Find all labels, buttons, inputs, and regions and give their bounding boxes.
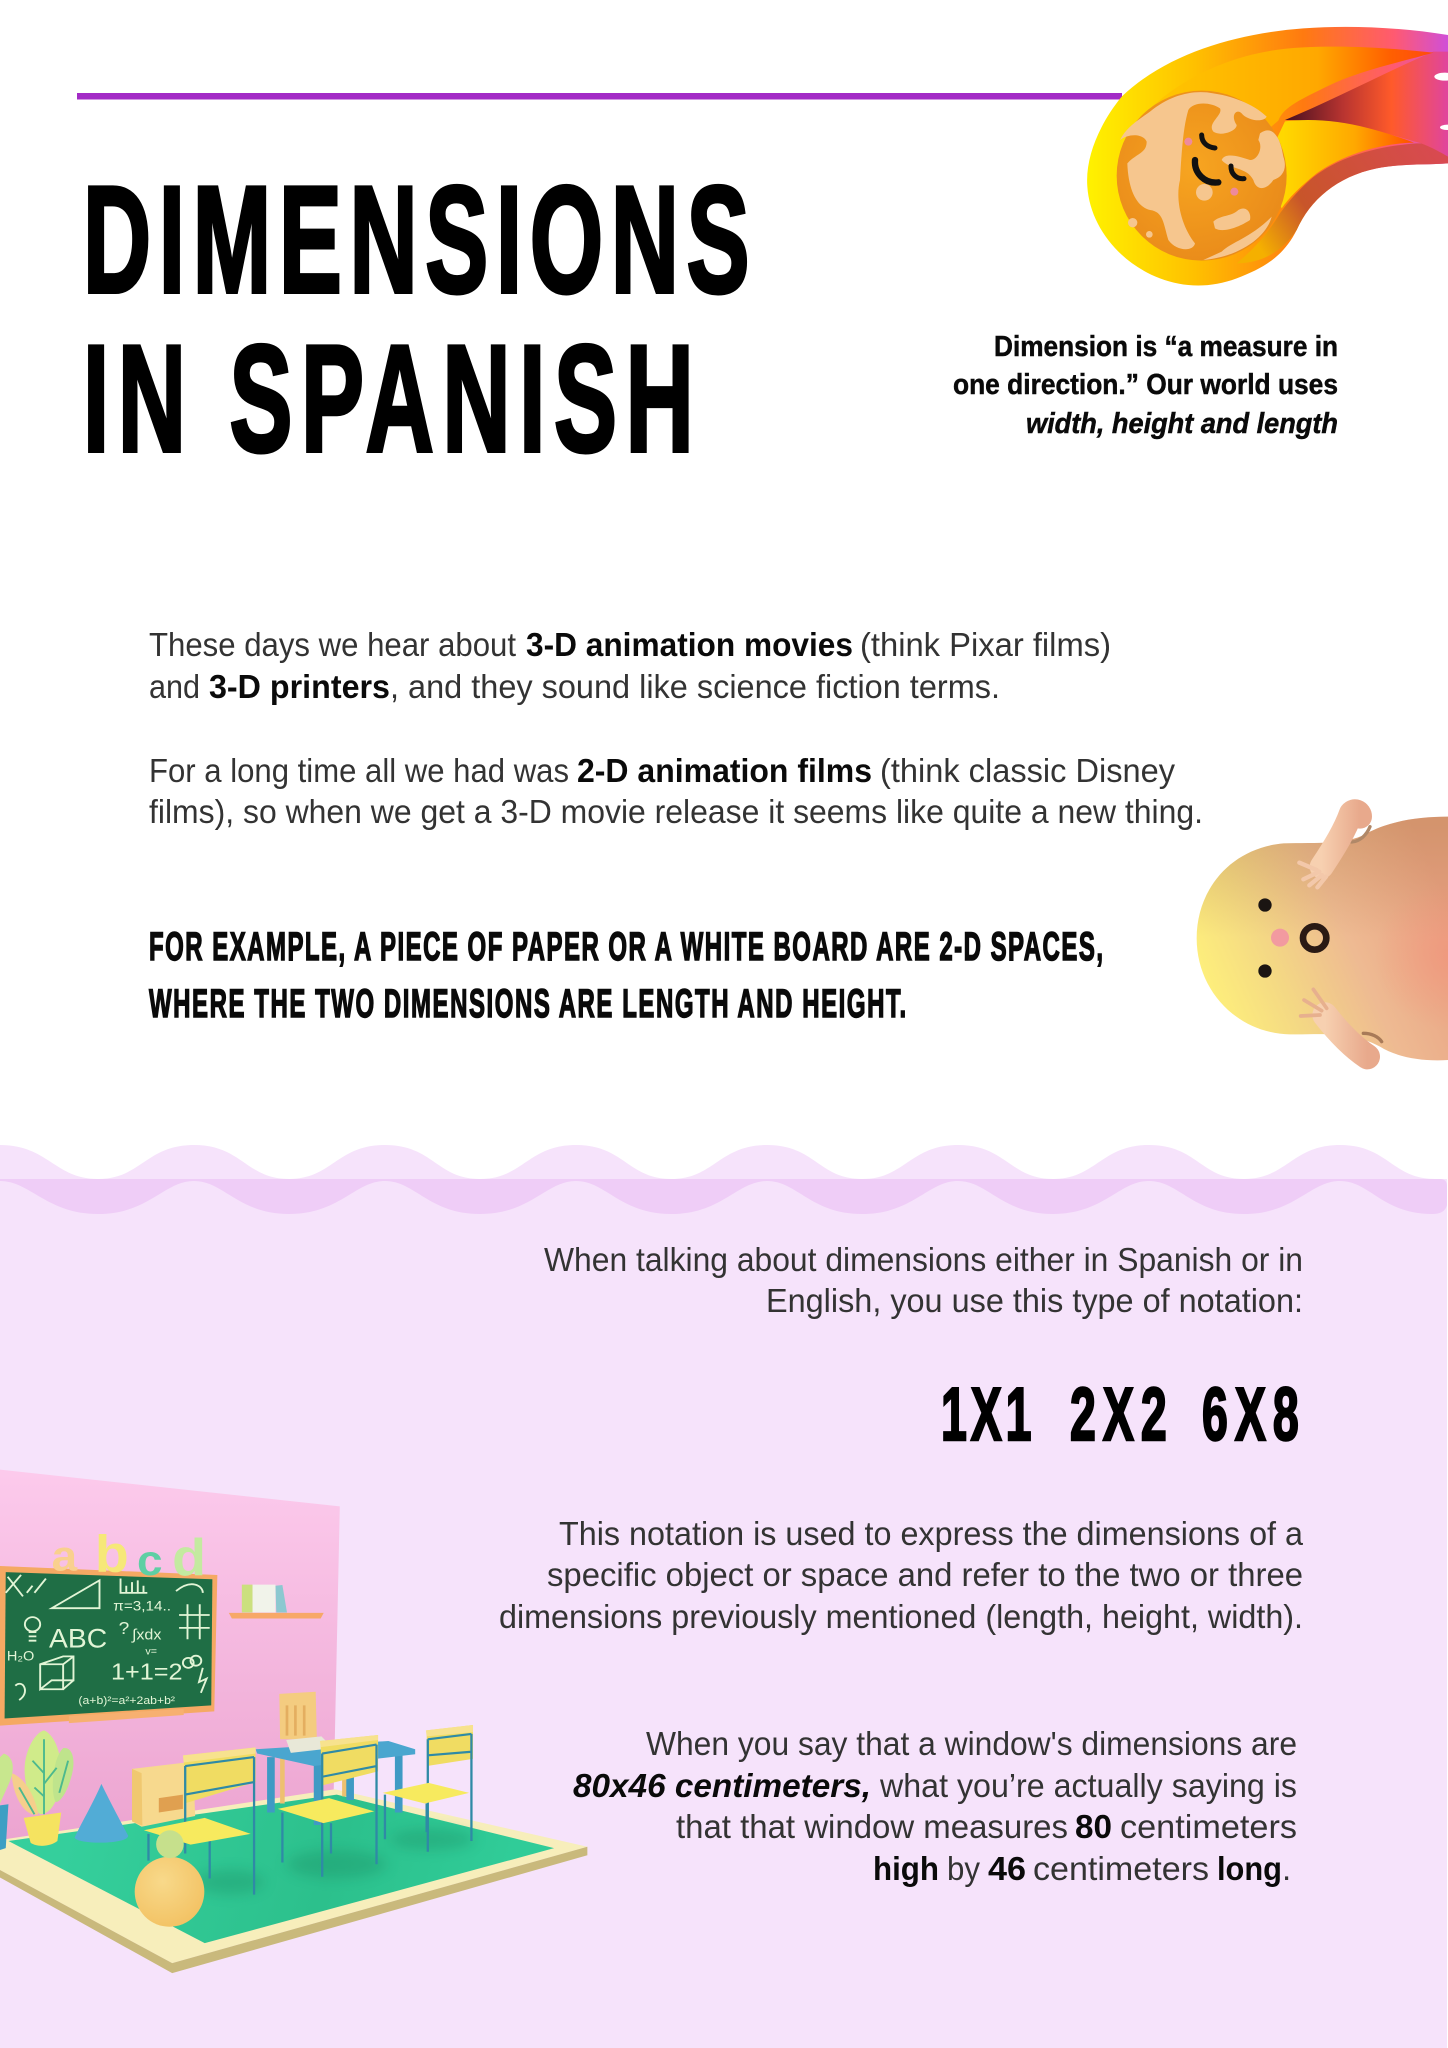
intro paragraph two: (think classic Disney [880, 752, 1175, 789]
stacked balls [135, 1830, 204, 1927]
uppercase example statement: FOR EXAMPLE, A PIECE OF PAPER OR A WHITE BOARD ARE 2-D SPACES, [149, 924, 1103, 968]
lilac lower background [0, 1145, 1447, 2048]
intro paragraph two: For a long time all we had was [149, 752, 569, 789]
planet face [1195, 135, 1244, 183]
window example: . [1282, 1850, 1291, 1887]
icon: potato character [1197, 811, 1448, 1060]
window example: When you say that a window's dimensions are [646, 1725, 1297, 1762]
planet sphere [1117, 91, 1287, 261]
chalk writing: 1+1=2 [111, 1659, 183, 1685]
tagline: width, height and length [1026, 408, 1338, 440]
window example: what you’re actually saying is [879, 1767, 1297, 1804]
character mouth [1303, 926, 1326, 950]
intro paragraph one [149, 626, 1111, 705]
character nose [1271, 929, 1289, 947]
notation intro: English, you use this type of notation: [766, 1282, 1303, 1319]
chalk writing: ABC [49, 1623, 107, 1653]
intro paragraph one: , and they sound like science fiction terms. [390, 668, 1000, 705]
chair shadows [195, 1829, 474, 1895]
title: DIMENSIONS [83, 155, 750, 324]
character eyes [1258, 898, 1272, 978]
notation explanation: specific object or space and refer to the two or three [547, 1556, 1303, 1593]
alphabet letters on board: b [95, 1525, 129, 1583]
notation examples: 2X2 [1070, 1374, 1167, 1457]
chalk writing: H₂O [7, 1648, 34, 1664]
notation intro: When talking about dimensions either in Spanish or in [544, 1241, 1303, 1278]
illustration: classroom [0, 1470, 587, 1973]
bedside cabinet [132, 1763, 195, 1827]
notation explanation: This notation is used to express the dimensions of a [559, 1515, 1304, 1552]
front right chair [383, 1725, 473, 1852]
window example: long [1217, 1850, 1282, 1887]
lower arm [1301, 989, 1382, 1057]
intro paragraph two [149, 752, 1203, 830]
title: IN SPANISH [83, 314, 694, 483]
notation examples [941, 1374, 1299, 1457]
notation explanation: dimensions previously mentioned (length, height, width). [499, 1598, 1303, 1635]
window example: 80x46 centimeters, [573, 1767, 871, 1804]
upper scalloped wave [0, 1145, 1435, 1179]
notation explanation [499, 1515, 1304, 1635]
comet inner shadow [1285, 52, 1448, 157]
notation examples: 1X1 [941, 1374, 1032, 1457]
purple header rule [77, 93, 1122, 100]
intro paragraph two: 2-D animation films [577, 752, 872, 789]
intro paragraph one: 3-D animation movies [526, 626, 853, 663]
upper arm [1299, 811, 1370, 887]
chalk writing: v= [145, 1647, 157, 1657]
blue cone [75, 1784, 128, 1843]
front left chair [144, 1747, 256, 1895]
chalk writing: ∫xdx [131, 1627, 162, 1643]
notation intro [544, 1241, 1303, 1319]
title [83, 155, 750, 483]
chalk writing: π=3,14.. [113, 1599, 171, 1615]
uppercase example statement [149, 924, 1103, 1025]
potted plants [0, 1730, 73, 1850]
tagline: one direction.” Our world uses [953, 369, 1338, 401]
upper flame [1145, 47, 1433, 133]
tail notches [1434, 73, 1448, 130]
notation examples: 6X8 [1202, 1374, 1299, 1457]
window example: high [873, 1850, 939, 1887]
lower flame [1263, 120, 1414, 208]
window example: that that window measures [676, 1808, 1068, 1845]
chalk writing [6, 1575, 210, 1707]
classroom wall [0, 1470, 340, 1841]
wall shelf with books [229, 1585, 324, 1619]
intro paragraph one: (think Pixar films) [860, 626, 1111, 663]
intro paragraph one: These days we hear about [149, 626, 516, 663]
comet outer body [1087, 27, 1448, 285]
chalk writing: ? [119, 1618, 129, 1638]
window example: 80 [1075, 1808, 1112, 1845]
darker lilac wave band [0, 1179, 1447, 1214]
character body [1197, 817, 1448, 1060]
tagline [953, 331, 1338, 440]
back wooden chair [279, 1692, 344, 1804]
alphabet letters on board [52, 1525, 206, 1587]
tagline: Dimension is “a measure in [994, 331, 1338, 363]
classroom floor base [0, 1789, 587, 1973]
chalkboard [0, 1566, 217, 1726]
intro paragraph one: 3-D printers [209, 668, 390, 705]
icon: smiling comet planet [1087, 27, 1448, 285]
alphabet letters on board: a [52, 1533, 78, 1580]
comet lower band [1237, 143, 1448, 263]
intro paragraph one: and [149, 668, 200, 705]
alphabet letters on board: d [172, 1529, 206, 1587]
blue table [256, 1736, 415, 1825]
chalk writing: (a+b)²=a²+2ab+b² [78, 1694, 175, 1707]
window example: 46 [988, 1850, 1026, 1887]
front middle chair [278, 1735, 378, 1877]
uppercase example statement: WHERE THE TWO DIMENSIONS ARE LENGTH AND HEIGHT. [149, 981, 906, 1025]
green carpet [8, 1795, 554, 1943]
window example: centimeters [1120, 1808, 1297, 1845]
window example: centimeters [1033, 1850, 1209, 1887]
planet cheeks [1184, 138, 1238, 196]
intro paragraph two: films), so when we get a 3-D movie release it seems like quite a new thing. [149, 793, 1203, 830]
alphabet letters on board: c [137, 1537, 163, 1585]
window example: by [947, 1850, 980, 1887]
window example [573, 1725, 1297, 1887]
planet continents [1120, 92, 1285, 260]
